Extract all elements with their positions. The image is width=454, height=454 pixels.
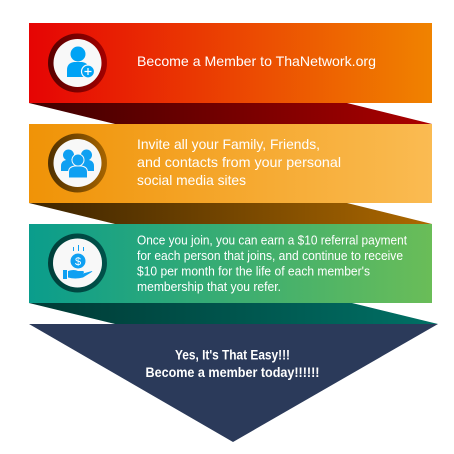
step 2 text: and contacts from your personal [137, 154, 341, 170]
panel: step 1 become a member [29, 23, 432, 103]
step 2 text [137, 136, 341, 188]
panel: call to action arrow [29, 324, 438, 442]
fold shadow: third band [29, 303, 438, 324]
icon: coin over open hand: $ [75, 256, 81, 268]
step 3 text: Once you join, you can earn a $10 referral payment [137, 232, 407, 248]
icon: member with plus badge [48, 34, 107, 92]
call to action text: Become a member today!!!!!! [146, 365, 320, 380]
icon: group of people [48, 134, 107, 192]
step 3 text: membership that you refer. [137, 279, 281, 294]
step 3 text [137, 232, 407, 294]
step 2 text: Invite all your Family, Friends, [137, 136, 320, 152]
step 2 text: social media sites [137, 172, 246, 188]
fold shadow: second band [29, 203, 432, 224]
call to action text: Yes, It's That Easy!!! [175, 348, 290, 362]
panel: step 2 invite contacts [29, 124, 432, 203]
icon: coin over open hand [48, 234, 107, 292]
fold shadow: first band [29, 103, 432, 124]
step 3 text: for each person that joins, and continue to receive [137, 248, 403, 263]
step 1 text: Become a Member to ThaNetwork.org [137, 53, 376, 69]
panel: step 3 earn referral payments [29, 224, 432, 303]
call to action text [146, 348, 320, 380]
step 3 text: $10 per month for the life of each member's [137, 264, 370, 278]
